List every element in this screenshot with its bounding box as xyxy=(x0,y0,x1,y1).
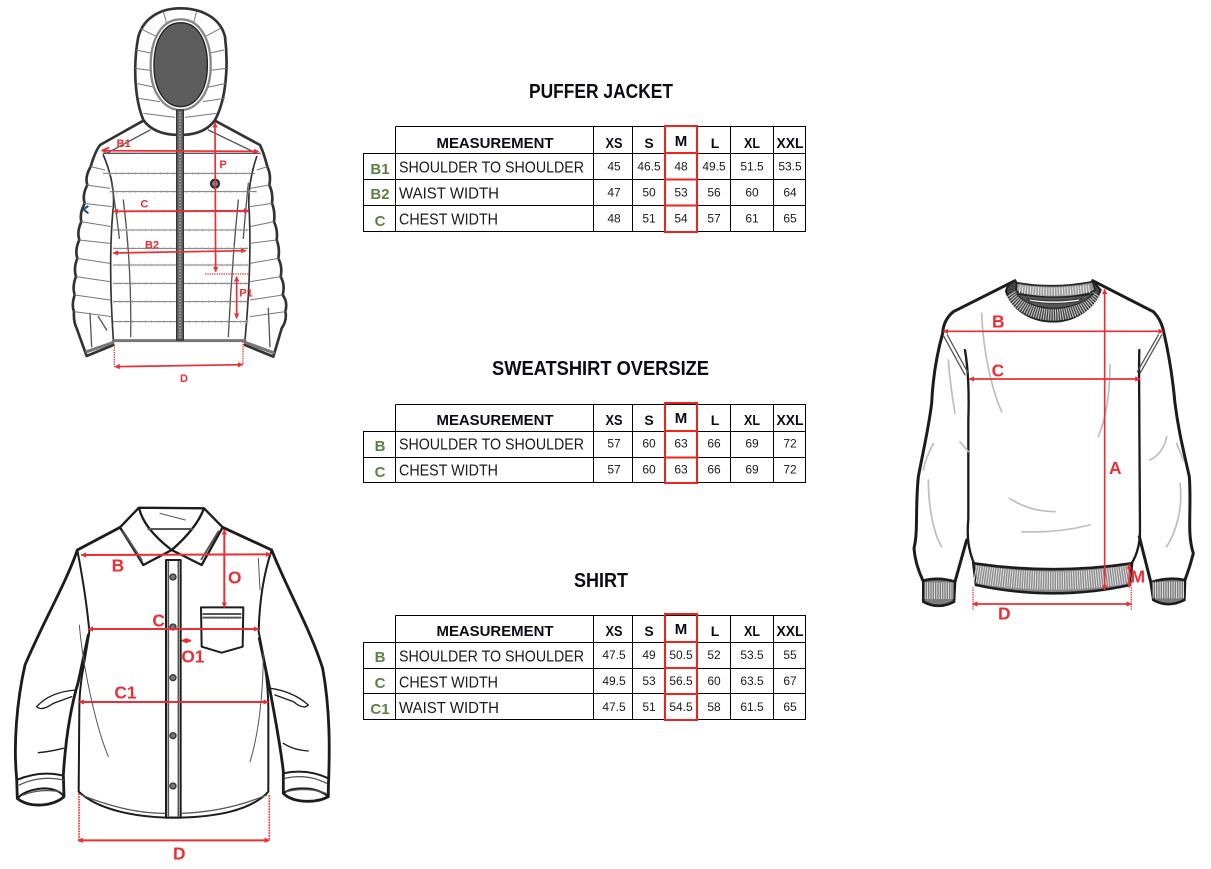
table: shirt: C1 xyxy=(370,701,390,718)
table: puffer jacket: 60 xyxy=(745,186,759,200)
table: shirt: B xyxy=(375,649,386,666)
cuffs xyxy=(923,579,1185,606)
quilting lines xyxy=(74,167,285,322)
table: puffer jacket: B1 xyxy=(370,161,390,178)
illustration: puffer jacket xyxy=(73,8,286,385)
table: sweatshirt oversize: 60 xyxy=(642,436,656,450)
table: shirt: XS xyxy=(606,623,622,640)
placket and buttons xyxy=(166,560,181,818)
table: sweatshirt oversize: MEASUREMENT xyxy=(436,412,554,429)
table: puffer jacket: 53 xyxy=(674,186,688,200)
table: puffer jacket: 46.5 xyxy=(637,160,661,174)
table: shirt: 63.5 xyxy=(740,674,764,688)
table: puffer jacket: XXL xyxy=(776,135,804,152)
title: shirt: SHIRT xyxy=(574,570,628,592)
table: sweatshirt oversize: C xyxy=(375,464,386,481)
table: puffer jacket: XL xyxy=(744,135,760,152)
table: sweatshirt oversize: 63 xyxy=(674,462,688,476)
table: shirt: 54.5 xyxy=(669,700,693,714)
measurement arrows: O xyxy=(228,567,241,587)
measurement arrows: M xyxy=(1131,567,1145,587)
title: puffer jacket: PUFFER JACKET xyxy=(529,81,673,103)
table: puffer jacket: 51 xyxy=(642,212,656,226)
table: puffer jacket: SHOULDER TO SHOULDER xyxy=(399,160,584,176)
table: puffer jacket: C xyxy=(375,213,386,230)
table: puffer jacket: M xyxy=(675,133,687,150)
illustration: shirt xyxy=(15,508,329,863)
table: sweatshirt oversize: 72 xyxy=(783,462,797,476)
table: puffer jacket: 45 xyxy=(607,160,621,174)
table: shirt: 47.5 xyxy=(602,648,626,662)
table: puffer jacket: 51.5 xyxy=(740,160,764,174)
table: sweatshirt oversize: 57 xyxy=(607,462,621,476)
table: shirt: MEASUREMENT xyxy=(436,623,554,640)
collar xyxy=(120,508,223,565)
table: sweatshirt oversize: 69 xyxy=(745,462,759,476)
measurement arrows xyxy=(102,123,259,385)
measurement arrows: D xyxy=(180,373,188,385)
title: sweatshirt oversize: SWEATSHIRT OVERSIZE xyxy=(492,358,709,380)
hood opening xyxy=(151,19,211,110)
table: puffer jacket: 56 xyxy=(707,186,721,200)
table: shirt: 61.5 xyxy=(740,700,764,714)
table: sweatshirt oversize: XS xyxy=(606,412,622,429)
table: puffer jacket: XS xyxy=(606,135,622,152)
table: sweatshirt oversize: SHOULDER TO SHOULDER xyxy=(399,436,584,454)
measurement arrows: P xyxy=(219,159,227,171)
table: puffer jacket: B2 xyxy=(370,186,390,203)
pocket xyxy=(201,607,243,653)
table: sweatshirt oversize: 66 xyxy=(707,436,721,450)
table: shirt: 56.5 xyxy=(669,674,693,688)
measurement arrows: C xyxy=(140,198,148,210)
table: puffer jacket: 54 xyxy=(674,212,688,226)
table: sweatshirt oversize: 66 xyxy=(707,462,721,476)
table: shirt: 53.5 xyxy=(740,648,764,662)
table: shirt: XL xyxy=(744,623,760,640)
hem rib xyxy=(973,563,1132,593)
blue mark xyxy=(83,206,88,213)
table: puffer jacket: MEASUREMENT xyxy=(436,135,554,152)
badge xyxy=(211,180,219,188)
table: puffer jacket: 65 xyxy=(783,212,797,226)
table: puffer jacket: 61 xyxy=(745,212,759,226)
measurement arrows: C1 xyxy=(114,682,137,702)
measurement arrows xyxy=(943,289,1163,624)
table: sweatshirt oversize: 63 xyxy=(674,436,688,450)
table: shirt: S xyxy=(644,623,654,639)
measurement arrows: C xyxy=(992,361,1005,381)
table: sweatshirt oversize: 57 xyxy=(607,436,621,450)
table: shirt: 53 xyxy=(642,674,656,688)
table: sweatshirt oversize xyxy=(364,403,806,483)
cuffs and folds xyxy=(17,772,328,799)
table: shirt: 51 xyxy=(642,700,656,714)
table: puffer jacket xyxy=(364,126,806,232)
table: sweatshirt oversize: XL xyxy=(744,412,760,429)
table: shirt: 55 xyxy=(783,648,797,662)
table: shirt: CHEST WIDTH xyxy=(399,674,498,692)
measurement arrows xyxy=(78,530,271,863)
table: sweatshirt oversize: 69 xyxy=(745,436,759,450)
table: shirt: 47.5 xyxy=(602,700,626,714)
table: puffer jacket: 64 xyxy=(783,186,797,200)
table: puffer jacket: WAIST WIDTH xyxy=(399,186,499,202)
table: puffer jacket: S xyxy=(644,135,654,151)
table: shirt: M xyxy=(675,621,687,638)
table: shirt: 50.5 xyxy=(669,648,693,662)
measurement arrows: O1 xyxy=(181,647,205,667)
measurement arrows: D xyxy=(173,843,186,863)
measurement arrows: A xyxy=(1109,458,1122,478)
measurement arrows: B1 xyxy=(117,138,131,150)
table: shirt xyxy=(364,614,806,720)
table: shirt: 49.5 xyxy=(602,674,626,688)
hood xyxy=(135,8,227,135)
table: shirt: 49 xyxy=(642,648,656,662)
measurement arrows: C xyxy=(152,610,165,630)
shoulder seams and folds xyxy=(944,335,1162,375)
table: sweatshirt oversize: 72 xyxy=(783,436,797,450)
table: shirt: 60 xyxy=(707,674,721,688)
measurement arrows: P1 xyxy=(239,287,253,299)
table: shirt: 58 xyxy=(707,700,721,714)
table: sweatshirt oversize: M xyxy=(675,410,687,427)
table: shirt: XXL xyxy=(776,623,804,640)
table: sweatshirt oversize: L xyxy=(711,412,720,428)
table: puffer jacket: 47 xyxy=(607,186,621,200)
table: shirt: 67 xyxy=(783,674,797,688)
measurement arrows: D xyxy=(998,604,1011,624)
table: puffer jacket: 57 xyxy=(707,212,721,226)
measurement arrows: B2 xyxy=(145,240,159,252)
illustration: sweatshirt xyxy=(914,281,1193,624)
measurement arrows: B xyxy=(992,311,1005,331)
table: shirt: 52 xyxy=(707,648,721,662)
zipper xyxy=(177,110,183,340)
table: puffer jacket: 50 xyxy=(642,186,656,200)
table: puffer jacket: 49.5 xyxy=(702,160,726,174)
table: puffer jacket: 48 xyxy=(607,212,621,226)
table: shirt: WAIST WIDTH xyxy=(399,700,499,717)
table: shirt: 65 xyxy=(783,700,797,714)
table: sweatshirt oversize: 60 xyxy=(642,462,656,476)
table: sweatshirt oversize: S xyxy=(644,412,654,428)
table: sweatshirt oversize: XXL xyxy=(776,412,804,429)
table: shirt: C xyxy=(375,675,386,692)
table: puffer jacket: 53.5 xyxy=(778,160,802,174)
measurement arrows: B xyxy=(112,556,124,576)
body outline xyxy=(73,121,143,356)
table: sweatshirt oversize: B xyxy=(375,438,386,455)
table: puffer jacket: CHEST WIDTH xyxy=(399,212,498,228)
table: shirt: SHOULDER TO SHOULDER xyxy=(399,648,584,666)
collar xyxy=(1006,281,1101,322)
table: sweatshirt oversize: CHEST WIDTH xyxy=(399,462,498,480)
table: puffer jacket: L xyxy=(711,135,720,151)
table: shirt: L xyxy=(711,623,720,639)
table: puffer jacket: 48 xyxy=(674,160,688,174)
